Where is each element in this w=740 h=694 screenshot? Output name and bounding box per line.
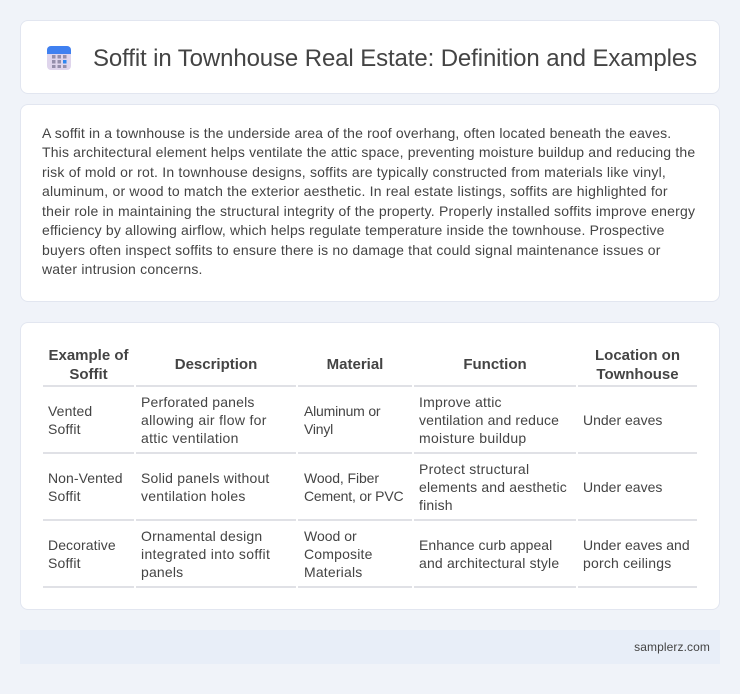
panel: intro paragraph: efficiency by allowing airflow, which helps regulate temperature inside the townhouse. Prospective: [42, 222, 665, 238]
row: vented soffit: [48, 394, 662, 446]
row: non-vented soffit: Protect structural: [419, 461, 529, 477]
header panel: [20, 20, 720, 94]
footer text: samplerz.com: [634, 640, 710, 654]
row: vented soffit: Soffit: [48, 421, 81, 437]
row: vented soffit: ventilation and reduce: [419, 412, 559, 428]
row: decorative soffit: Composite: [304, 546, 373, 562]
row: non-vented soffit: elements and aesthetic: [419, 479, 567, 495]
row: decorative soffit: Soffit: [48, 555, 81, 571]
table header: Function: [463, 356, 527, 373]
panel: intro paragraph: their role in maintaining the structural integrity of the property. Properly installed soffits improve energy: [42, 203, 695, 219]
row: non-vented soffit: Non-Vented: [48, 470, 123, 486]
row: non-vented soffit: Soffit: [48, 488, 81, 504]
row: vented soffit: allowing air flow for: [141, 412, 267, 428]
row: decorative soffit: Enhance curb appeal: [419, 537, 552, 553]
table header: Description: [175, 356, 257, 373]
panel: soffit table: [20, 322, 720, 610]
row: decorative soffit: panels: [141, 564, 183, 580]
row: decorative soffit: Under eaves and: [583, 537, 690, 553]
row: decorative soffit: [48, 528, 690, 580]
row: vented soffit: Under eaves: [583, 412, 662, 428]
panel: intro paragraph: buyers often inspect soffits to ensure there is no damage that could signal maintenance issues or: [42, 242, 661, 258]
table header: [48, 347, 680, 383]
row: vented soffit: Vinyl: [304, 421, 333, 437]
row: non-vented soffit: finish: [419, 497, 453, 513]
table header: Location on Townhouse: [595, 347, 680, 383]
row: decorative soffit: integrated into soffit: [141, 546, 270, 562]
footer bar: [20, 630, 720, 664]
row: non-vented soffit: [48, 461, 662, 513]
panel: intro paragraph: This architectural element helps ventilate the attic space, preventing moisture buildup and reducing the: [42, 144, 695, 160]
row: non-vented soffit: Under eaves: [583, 479, 662, 495]
panel: intro paragraph: risk of mold or rot. In townhouse designs, soffits are typically constructed from materials like vinyl,: [42, 164, 666, 180]
row: vented soffit: Aluminum or: [304, 403, 380, 419]
row: decorative soffit: Materials: [304, 564, 362, 580]
table header: Material: [327, 356, 383, 373]
row: decorative soffit: and architectural style: [419, 555, 559, 571]
panel: intro paragraph: A soffit in a townhouse is the underside area of the roof overhang, often located beneath the eaves.: [42, 125, 671, 141]
panel: intro paragraph: [20, 104, 720, 302]
row: non-vented soffit: Cement, or PVC: [304, 488, 403, 504]
row: vented soffit: Perforated panels: [141, 394, 255, 410]
panel: intro paragraph: water intrusion concerns.: [42, 261, 203, 277]
row: non-vented soffit: Solid panels without: [141, 470, 270, 486]
row: vented soffit: Vented: [48, 403, 92, 419]
row: vented soffit: Improve attic: [419, 394, 502, 410]
row: decorative soffit: porch ceilings: [583, 555, 671, 571]
panel: intro paragraph: aluminum, or wood to match the exterior aesthetic. In real estate listings, soffits are highlighted for: [42, 183, 668, 199]
row: non-vented soffit: ventilation holes: [141, 488, 246, 504]
row: vented soffit: moisture buildup: [419, 430, 527, 446]
row: decorative soffit: Decorative: [48, 537, 116, 553]
table header: Example of Soffit: [48, 347, 129, 383]
icon: calendar: [47, 46, 71, 70]
row: decorative soffit: Ornamental design: [141, 528, 262, 544]
row: decorative soffit: Wood or: [304, 528, 357, 544]
row: vented soffit: attic ventilation: [141, 430, 239, 446]
row: non-vented soffit: Wood, Fiber: [304, 470, 379, 486]
title: Soffit in Townhouse Real Estate: Definition and Examples: [93, 45, 697, 72]
